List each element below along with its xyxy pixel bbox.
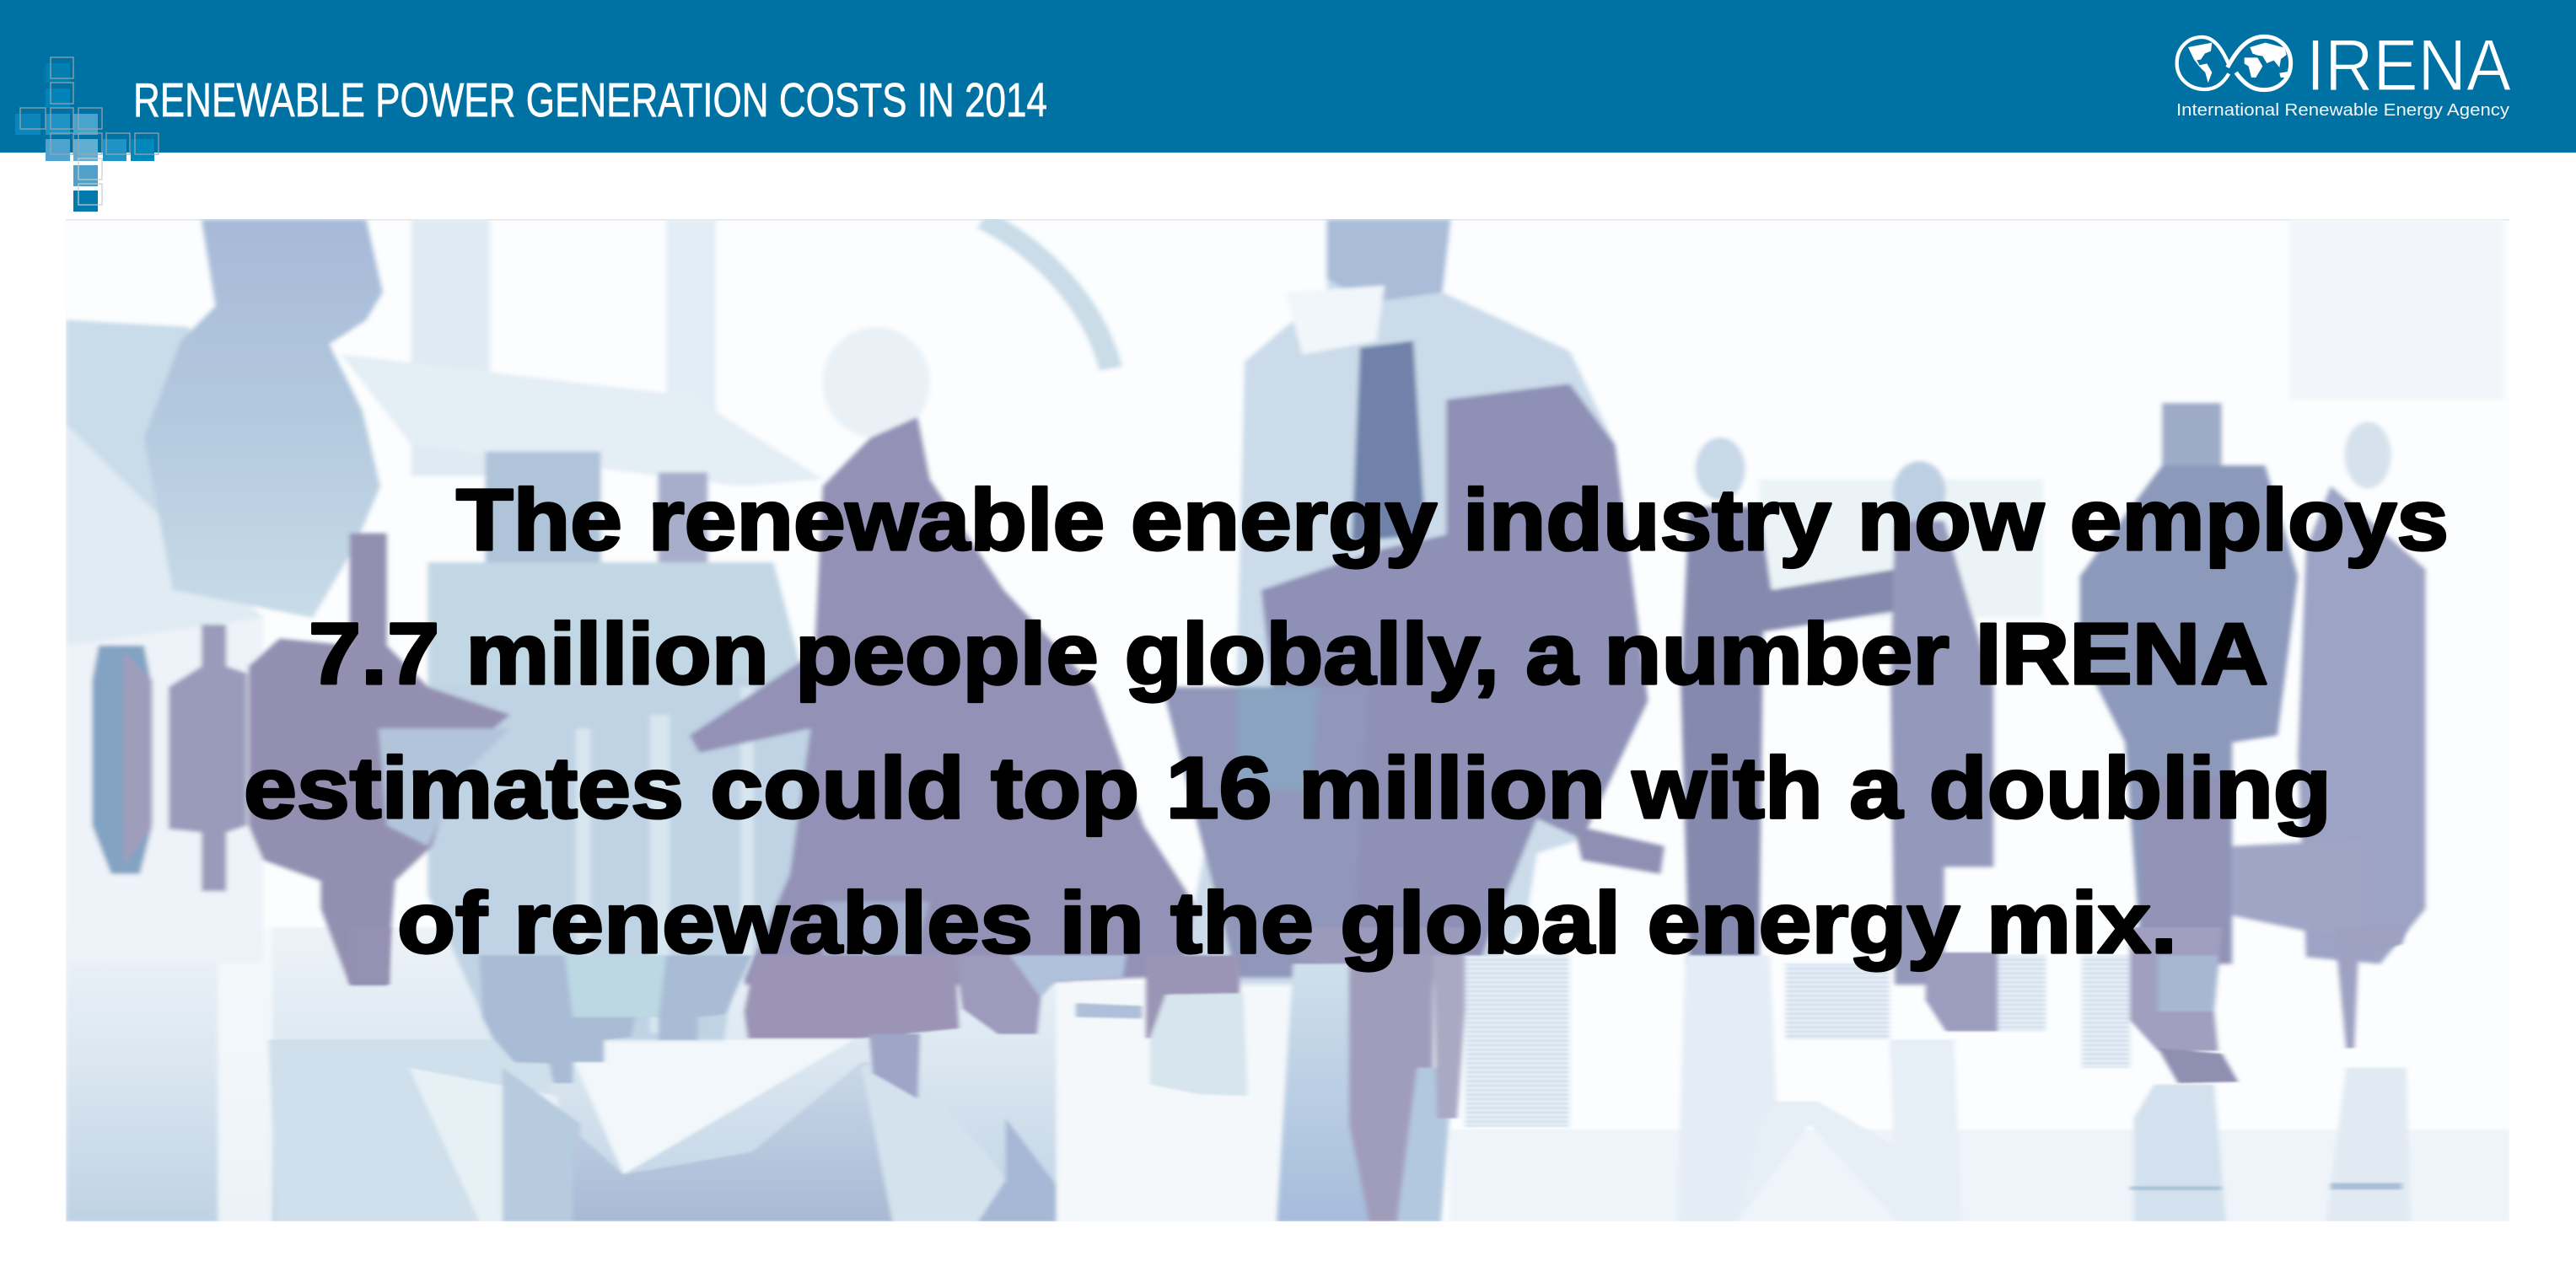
logo: IRENA [2176, 25, 2512, 120]
headline line 3: estimates could top 16 million with a doubling [244, 739, 2331, 836]
headline line 1: The renewable energy industry now employs [456, 471, 2449, 568]
title: RENEWABLE POWER GENERATION COSTS IN 2014 [133, 73, 1047, 127]
logo tagline: International Renewable Energy Agency [2176, 101, 2509, 120]
photo: lower-right legs and floor [1277, 927, 2509, 1221]
header bar [0, 0, 2576, 153]
photo: left half silhouettes [66, 220, 1242, 1040]
headline line 4: of renewables in the global energy mix. [397, 874, 2177, 971]
photo: right half silhouettes [1163, 220, 2503, 991]
logo wordmark: IRENA [2306, 25, 2512, 106]
icon: blue squares cross [15, 57, 159, 212]
photo: lower-left floor reflections [66, 927, 1073, 1221]
icon: infinity globe [2177, 36, 2291, 90]
headline text block [244, 471, 2449, 971]
panel: photo of business people [66, 219, 2509, 1221]
headline line 2: 7.7 million people globally, a number IRENA [309, 605, 2268, 702]
photo: lower-middle hanging shapes [351, 927, 1247, 1098]
